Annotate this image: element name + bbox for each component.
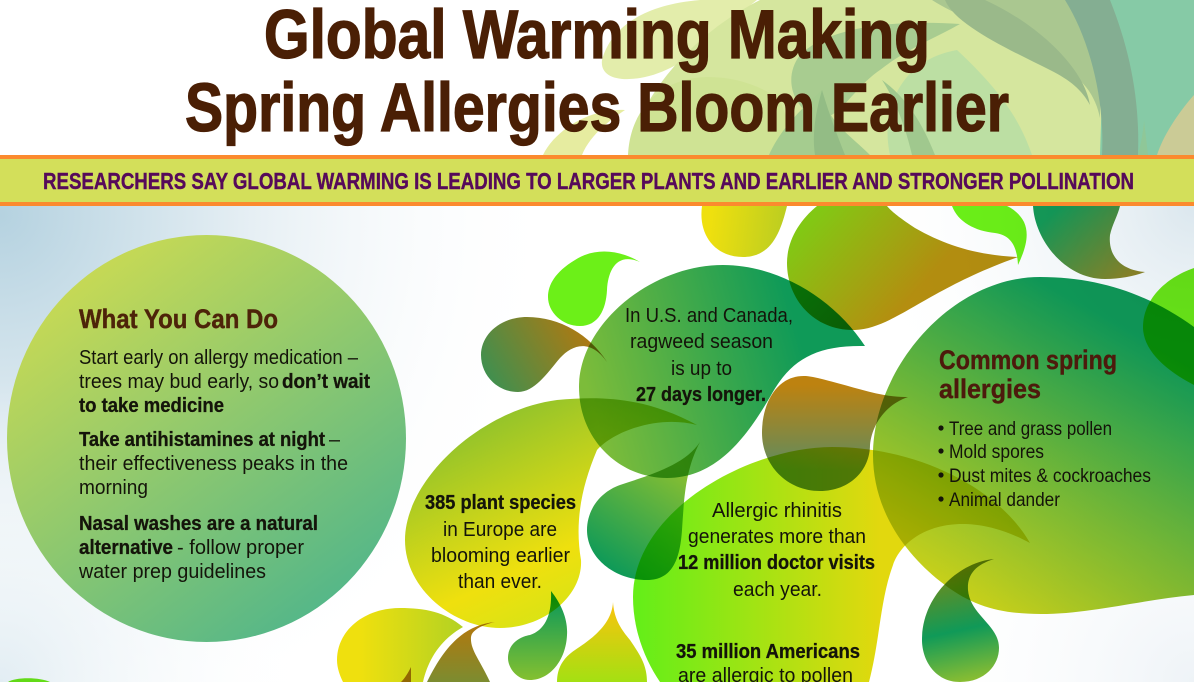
text: allergic rhinitis stat: each year. xyxy=(733,579,822,601)
text: plant species stat: blooming earlier xyxy=(431,545,570,567)
leaf: plant species stat xyxy=(405,398,697,628)
text: plant species stat: than ever. xyxy=(458,571,542,593)
tip: start early: Start early on allergy medication – xyxy=(79,347,359,369)
leaf: ragweed stat xyxy=(579,265,865,478)
leaf: bottom brown xyxy=(427,622,495,682)
text: plant species stat: 385 plant species xyxy=(425,492,576,514)
tip: antihistamines: Take antihistamines at night xyxy=(79,429,325,451)
leaf: common allergies xyxy=(873,277,1194,614)
leaf: bottom left yellow xyxy=(337,608,463,682)
leaf: bottom-left corner green xyxy=(8,678,50,682)
text: allergic rhinitis stat: generates more than xyxy=(688,526,866,548)
text: allergic rhinitis stat: 12 million doctor visits xyxy=(678,552,875,574)
tip: start early: don’t wait xyxy=(282,371,370,393)
leaf: rhinitis stat xyxy=(633,447,1030,682)
tip: antihistamines: morning xyxy=(79,477,148,499)
text: allergic rhinitis stat xyxy=(678,500,875,601)
leaf: top bright green xyxy=(952,206,1027,265)
heading: common spring allergies: allergies xyxy=(939,374,1041,404)
text: ragweed stat: ragweed season xyxy=(630,331,773,353)
subtitle banner xyxy=(0,155,1194,206)
text: plant species stat xyxy=(425,492,576,593)
leaf: right edge bright green xyxy=(1143,268,1194,385)
tip: start early: trees may bud early, so xyxy=(79,371,279,393)
text: 35 million americans stat xyxy=(676,641,860,682)
text: plant species stat: in Europe are xyxy=(443,519,557,541)
tip: nasal washes: Nasal washes are a natural xyxy=(79,513,318,535)
panel: what you can do xyxy=(7,235,406,642)
list: allergens: Mold spores xyxy=(949,442,1044,463)
text: allergic rhinitis stat: Allergic rhinitis xyxy=(712,500,842,522)
list: allergens: Animal dander xyxy=(949,490,1061,511)
tip: nasal washes: alternative xyxy=(79,537,173,559)
leaf: top yellow xyxy=(701,206,787,257)
leaf: brown sliver xyxy=(401,667,411,682)
leaf: bottom yellow spade xyxy=(557,602,647,682)
heading: common spring allergies xyxy=(939,345,1117,404)
tip: start early: to take medicine xyxy=(79,395,224,417)
text: ragweed stat xyxy=(625,305,793,406)
leaf cluster illustration xyxy=(8,206,1194,682)
title xyxy=(185,0,1009,146)
list: allergens: Tree and grass pollen xyxy=(949,419,1112,440)
header foliage decoration xyxy=(543,0,1194,155)
tip: nasal washes: - follow proper xyxy=(177,537,304,559)
heading: what you can do: What You Can Do xyxy=(79,304,278,334)
text: ragweed stat: is up to xyxy=(671,358,732,380)
leaf: top right green xyxy=(1033,206,1145,279)
tip: nasal washes: water prep guidelines xyxy=(78,561,266,583)
panel text: common spring allergies xyxy=(938,345,1151,511)
text: ragweed stat: In U.S. and Canada, xyxy=(625,305,793,327)
leaf: brown-green droplet xyxy=(481,317,607,392)
leaf: dark green droplet xyxy=(587,442,700,580)
list: allergens xyxy=(938,419,1151,511)
text: 35 million americans stat: 35 million Americans xyxy=(676,641,860,663)
text: ragweed stat: 27 days longer. xyxy=(636,384,766,406)
list: allergens: Dust mites & cockroaches xyxy=(949,466,1151,487)
leaf: small green bottom xyxy=(508,591,567,680)
leaf: orange-brown droplet xyxy=(762,376,908,491)
leaf: large olive top xyxy=(787,206,1018,330)
leaf: small bright green xyxy=(548,252,640,326)
tip: antihistamines: – xyxy=(329,429,341,451)
title: Spring Allergies Bloom Earlier xyxy=(185,69,1009,146)
tip: start early xyxy=(79,347,370,417)
leaf: teal droplet xyxy=(922,559,999,682)
tip: antihistamines xyxy=(79,429,348,499)
tip: nasal washes xyxy=(78,513,318,583)
heading: common spring allergies: Common spring xyxy=(939,345,1117,375)
tip: antihistamines: their effectiveness peaks in the xyxy=(79,453,348,475)
